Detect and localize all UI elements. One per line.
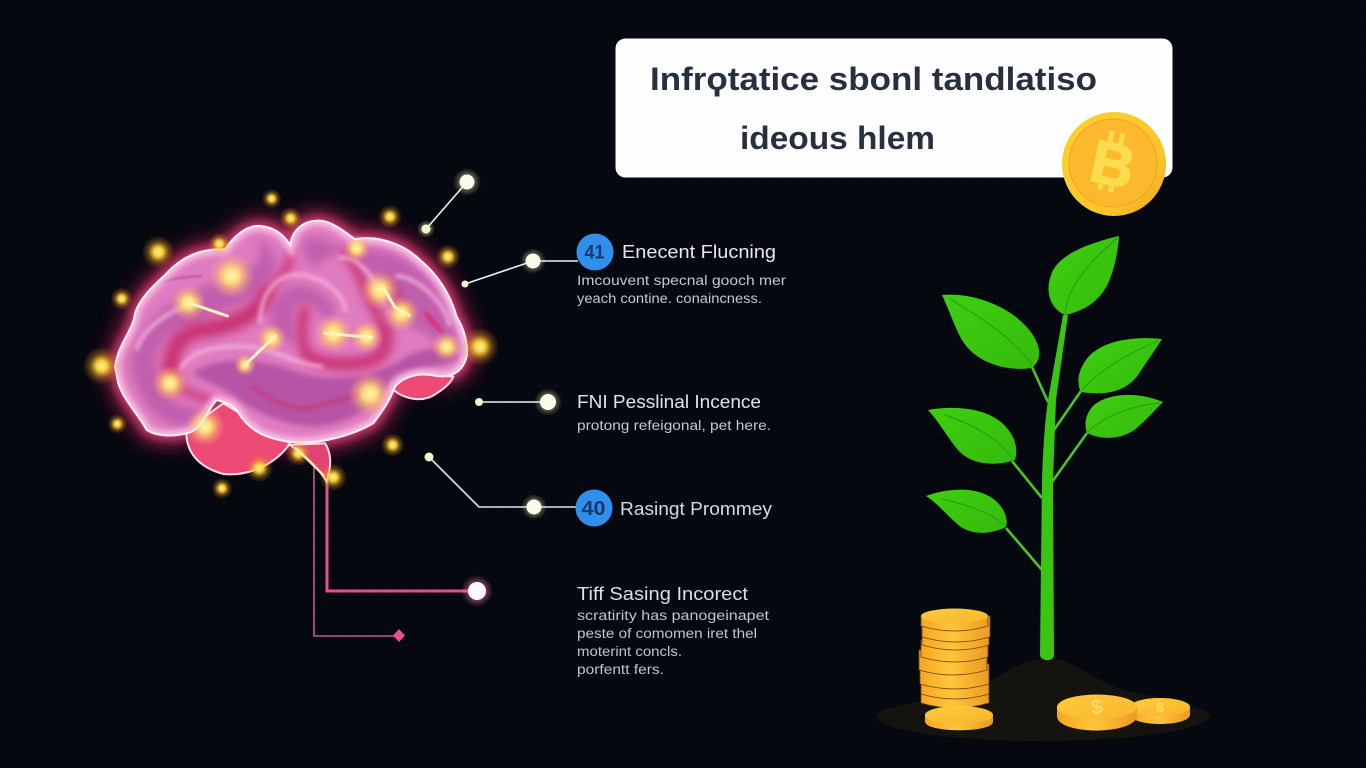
item: FNI Pesslinal Incence bbox=[577, 392, 771, 433]
item: Tiff Sasing Incorect: moterint concls. bbox=[577, 644, 682, 659]
leaf: mid left bbox=[928, 408, 1016, 464]
brain outer sparks bbox=[82, 189, 499, 499]
item: FNI Pesslinal Incence: FNI Pesslinal Incence bbox=[577, 392, 761, 412]
coin: large dollar bbox=[1057, 694, 1137, 730]
item: Enecent Flucning: Enecent Flucning bbox=[622, 242, 776, 262]
coin: stack base bbox=[925, 706, 993, 730]
branches bbox=[1006, 367, 1087, 570]
soil mound bbox=[877, 658, 1210, 741]
leaf: top bbox=[1049, 236, 1119, 315]
leaf: upper right bbox=[1078, 338, 1162, 393]
item: FNI Pesslinal Incence: protong refeigonal, pet here. bbox=[577, 417, 771, 433]
badge 40: 40 bbox=[582, 498, 606, 520]
icon: bitcoin coin: B bbox=[1085, 127, 1141, 202]
lobe rim highlights bbox=[137, 258, 450, 370]
leaf: lower left bbox=[926, 490, 1007, 533]
item: Enecent Flucning bbox=[576, 234, 787, 306]
coin: small dollar bbox=[1130, 698, 1190, 724]
leaf: upper left bbox=[942, 295, 1039, 369]
badge 40 bbox=[576, 490, 612, 526]
item: Enecent Flucning: Imcouvent specnal gooch mer bbox=[577, 273, 787, 288]
connector: top diagonal bbox=[417, 168, 481, 238]
badge 41 bbox=[576, 234, 614, 270]
item: Enecent Flucning: yeach contine. conaincness. bbox=[577, 291, 762, 306]
brain cerebellum bbox=[187, 373, 453, 482]
item: Rasingt Prommey bbox=[576, 490, 772, 526]
plant bbox=[926, 236, 1163, 660]
stem bbox=[1040, 315, 1068, 660]
icon: bitcoin coin bbox=[1062, 112, 1166, 216]
brain crevices bbox=[171, 253, 408, 405]
connector: thick pink line bbox=[327, 470, 477, 591]
connector: to item 41 bbox=[462, 248, 578, 288]
brain inner sparks bbox=[152, 234, 462, 447]
coin: large dollar: $ bbox=[1090, 695, 1105, 720]
item: Tiff Sasing Incorect bbox=[577, 584, 769, 677]
item: Rasingt Prommey: Rasingt Prommey bbox=[620, 499, 772, 519]
connector: to second item bbox=[475, 388, 562, 416]
badge 41: 41 bbox=[584, 242, 605, 264]
connector: to item 40 bbox=[424, 452, 577, 520]
item: Tiff Sasing Incorect: Tiff Sasing Incorect bbox=[577, 584, 748, 604]
item: Tiff Sasing Incorect: scratirity has panogeinapet bbox=[577, 608, 769, 623]
item: Tiff Sasing Incorect: porfentt fers. bbox=[577, 662, 664, 677]
brain body bbox=[115, 221, 467, 447]
connector: thin pink line with diamond bbox=[314, 465, 405, 642]
item: Tiff Sasing Incorect: peste of comomen iret thel bbox=[577, 626, 757, 641]
coin: small dollar: $ bbox=[1156, 699, 1164, 715]
title text: Infrϙtatice sbonl tandlatiso bbox=[650, 61, 1097, 97]
title text: ideous hlem bbox=[740, 120, 935, 156]
coin stack bbox=[919, 608, 990, 708]
brain halo bbox=[115, 221, 467, 443]
title text bbox=[650, 61, 1097, 156]
icon: glowing brain bbox=[115, 221, 467, 482]
connector node: pink line end bbox=[461, 575, 493, 607]
title card bbox=[616, 38, 1172, 178]
leaf: mid right bbox=[1085, 395, 1163, 438]
